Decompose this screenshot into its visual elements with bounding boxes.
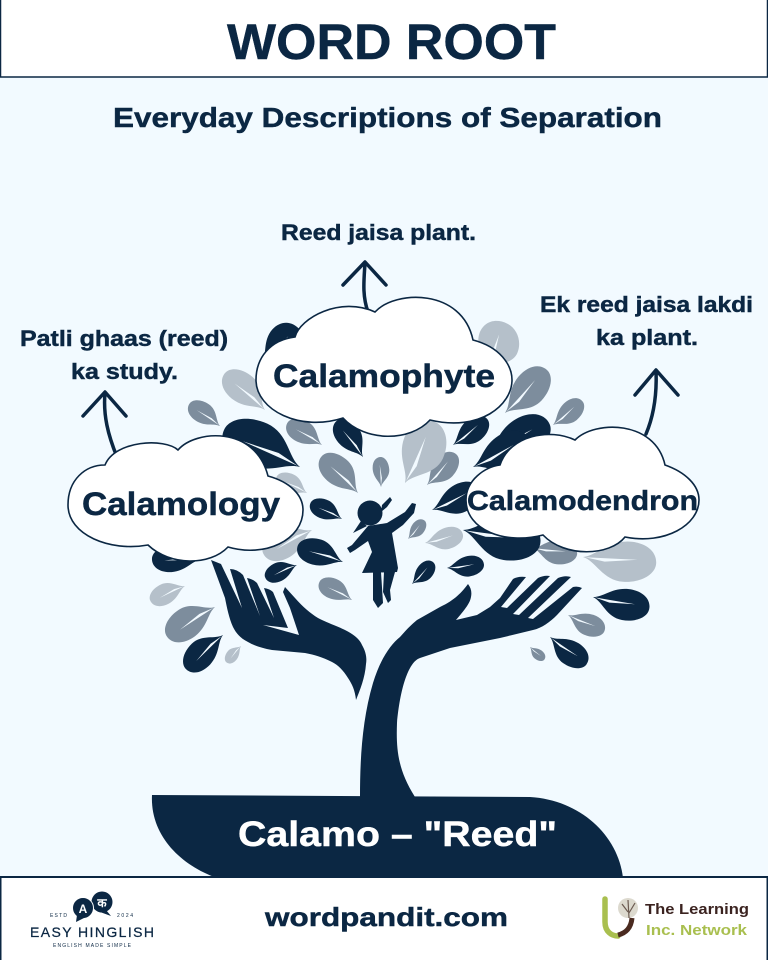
cloud: Calamodendron: Calamodendron [467,485,698,516]
icon: speech bubbles [72,892,112,922]
tree made of two hands [152,560,623,878]
footer panel [0,877,768,960]
logo: The Learning Inc. Network: The Learning [645,901,749,918]
cloud: Calamology [68,436,303,561]
website: wordpandit.com [264,902,508,932]
logo: Easy Hinglish [30,892,154,949]
logo: The Learning Inc. Network: Inc. Network [646,922,748,939]
trunk and right hand [360,576,582,797]
title: WORD ROOT [227,14,556,70]
header panel [0,0,768,77]
leaves: light gray [146,314,658,666]
logo: Easy Hinglish: 2024 [117,913,133,919]
leaves: medium gray [158,359,609,664]
arrow: up from Calamophyte [343,262,386,312]
arrow: up from Calamodendron [635,370,678,434]
logo: The Learning Inc. Network [605,898,749,939]
definition: Calamodendron [540,292,753,350]
cloud: Calamology: Calamology [82,486,280,522]
child silhouette [347,497,416,608]
definition: Calamology: Patli ghaas (reed) [20,326,228,351]
definition: Calamodendron: ka plant. [596,325,698,350]
subtitle: Everyday Descriptions of Separation [113,102,662,133]
icon: speech bubbles: क [96,896,107,910]
cloud: Calamophyte [256,297,512,436]
definition: Calamodendron: Ek reed jaisa lakdi [540,292,753,317]
logo: Easy Hinglish: ENGLISH MADE SIMPLE [53,943,132,949]
root word label: Calamo – "Reed" [238,815,557,854]
leaves: dark navy [151,316,653,679]
definition: Calamophyte: Reed jaisa plant. [281,220,476,245]
icon: tree in U [605,898,638,936]
logo: Easy Hinglish: EASY HINGLISH [30,924,154,940]
definition: Calamology [20,326,228,384]
arrow: up from Calamology [83,392,126,457]
ground mound [152,795,623,878]
logo: Easy Hinglish: ESTD [50,913,67,919]
cloud: Calamophyte: Calamophyte [273,358,495,394]
definition: Calamology: ka study. [71,359,178,384]
left hand [211,560,366,700]
icon: speech bubbles: A [79,902,88,916]
cloud: Calamodendron [466,427,699,552]
